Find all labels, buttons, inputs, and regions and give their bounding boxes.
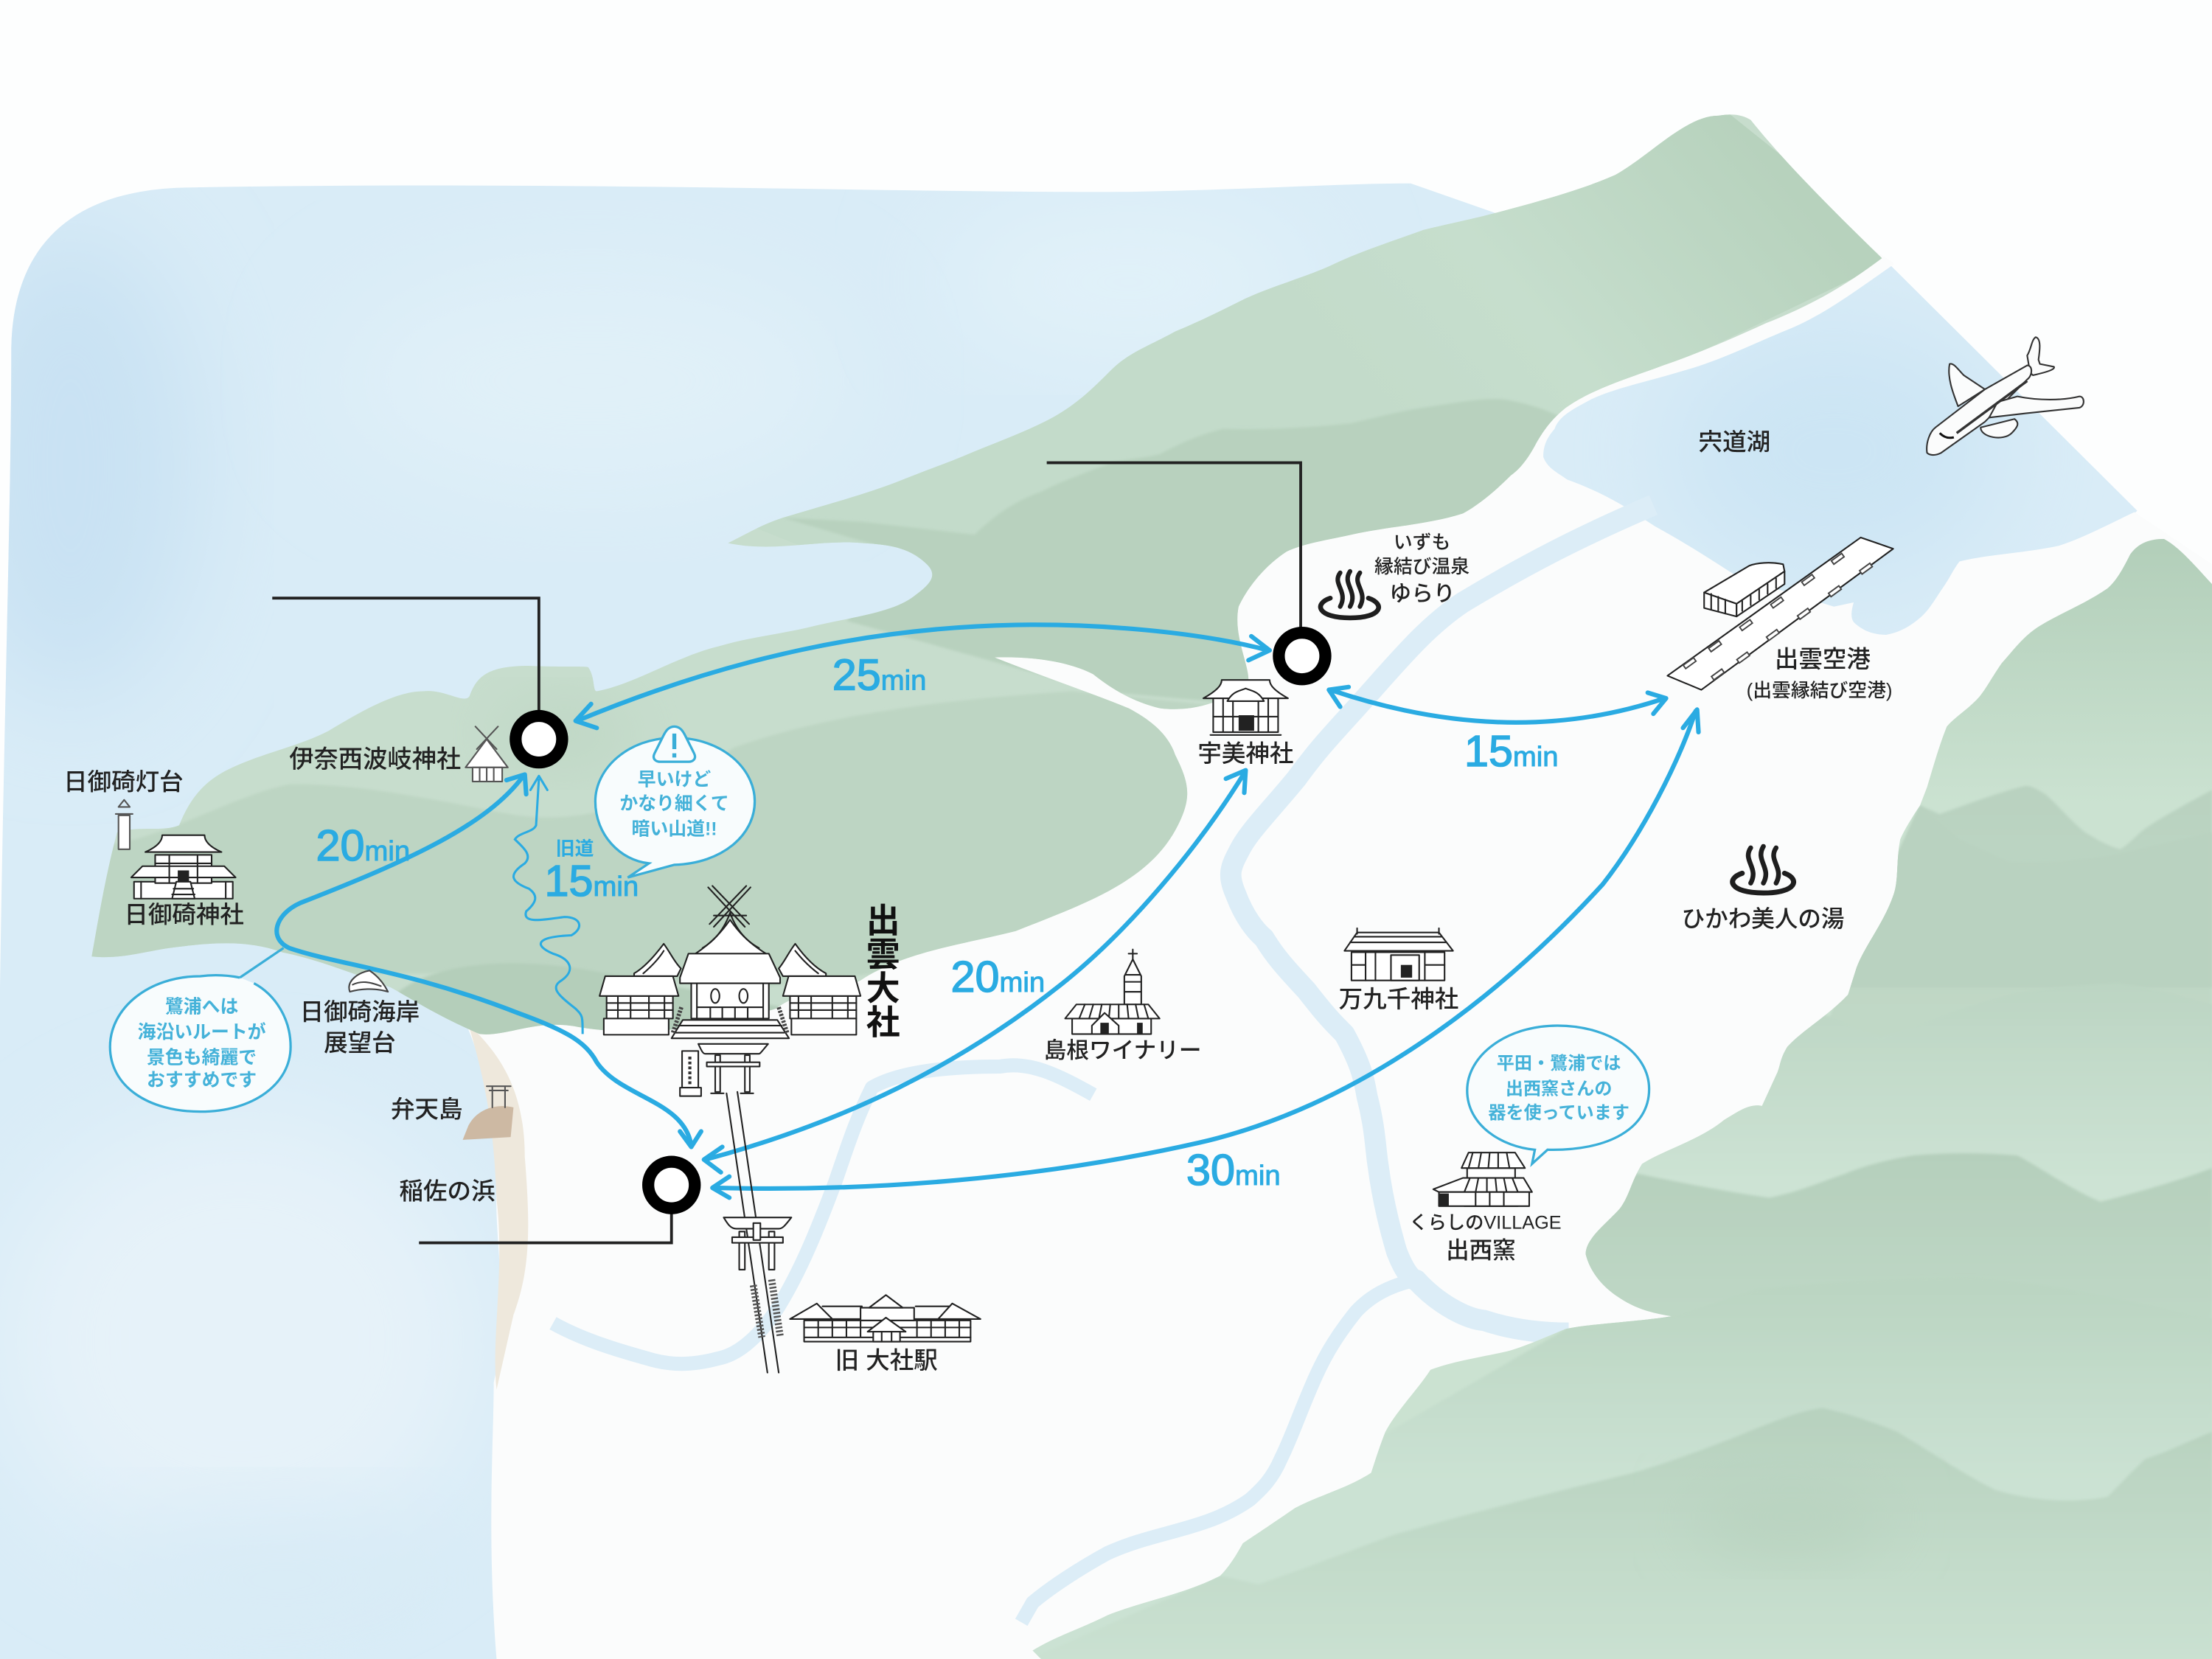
- right wing: [790, 996, 856, 1018]
- label: airport nickname: (出雲縁結び空港): [1747, 680, 1893, 701]
- label: lookout second line: 展望台: [324, 1029, 396, 1056]
- time label: 30min: 30min: [1186, 1145, 1281, 1194]
- callout: Shussai kiln tableware: 平田・鷺浦では: [1497, 1054, 1621, 1074]
- callout: Shussai kiln tableware: 出西窯さんの: [1506, 1079, 1612, 1099]
- icon: Shimane winery: [1065, 950, 1160, 1034]
- callout: coastal route: 鷺浦へは: [165, 997, 238, 1018]
- label: Izumo Enmusubi onsen: ゆらり: [1390, 582, 1455, 606]
- label: Lake Shinji: 宍道湖: [1699, 428, 1770, 455]
- label: Kurashi no village: くらしのVILLAGE: [1409, 1212, 1562, 1233]
- time label: 20min west: 20min: [316, 821, 410, 870]
- label: Hinomisaki shrine: 日御碕神社: [124, 901, 244, 928]
- icon: Yurari hot spring: [1321, 571, 1379, 618]
- callout: old road warning: かなり細くて: [619, 793, 729, 814]
- rivers: [553, 505, 1653, 1622]
- icon: airport hangar: [1704, 563, 1784, 616]
- central hall: [692, 982, 769, 1018]
- lead line: Yurari stop: [1047, 463, 1301, 629]
- label: Inasaki shrine: 伊奈西波岐神社: [289, 746, 461, 773]
- heading: Izumo Taisha: [866, 902, 900, 1041]
- north range shading: [757, 114, 1882, 546]
- icon: pine rows: [754, 1279, 780, 1338]
- time label: 15min old road: 15min: [545, 856, 639, 905]
- left wing: [607, 996, 673, 1018]
- route: old mountain road 15min: [513, 776, 582, 1034]
- label: Umi shrine: 宇美神社: [1197, 740, 1293, 767]
- callout: coastal route: [110, 948, 291, 1112]
- route: 30min Taisha to airport: [712, 709, 1699, 1197]
- mountains: south-east range: [987, 522, 2212, 1659]
- route: 20min west loop: [276, 774, 701, 1147]
- label: Shimane winery: 島根ワイナリー: [1044, 1038, 1201, 1063]
- icon: Shussai kiln house: [1433, 1152, 1532, 1206]
- stop ring: Inasaki: [515, 716, 562, 762]
- land: [465, 251, 2212, 1659]
- route: 20min Taisha to Umi: [704, 771, 1245, 1172]
- label: Hinomisaki lighthouse: 日御碕灯台: [63, 768, 184, 795]
- callout: coastal route: 海沿いルートが: [138, 1021, 266, 1043]
- icon: Hinomisaki shrine: [131, 835, 236, 899]
- icon: coastal rock: [349, 970, 388, 992]
- label: Izumo Enmusubi onsen: [1374, 532, 1470, 606]
- icon: Inasaki shrine: [465, 726, 508, 782]
- heading: Izumo Taisha: 雲: [866, 936, 900, 974]
- label: Bentenjima: 弁天島: [391, 1096, 463, 1122]
- icon: Umi shrine: [1203, 680, 1288, 735]
- label: Izumo airport: 出雲空港: [1775, 646, 1871, 672]
- time label: 25min: 25min: [832, 650, 926, 700]
- icon: Izumo Taisha main shrine: [599, 886, 860, 1038]
- label: Mankusen shrine: 万九千神社: [1339, 986, 1458, 1012]
- stop ring: Taisha: [648, 1162, 695, 1208]
- stop ring: Umi: [1279, 633, 1326, 679]
- heading: Izumo Taisha: 出: [866, 902, 900, 940]
- label: Izumo Enmusubi onsen: 縁結び温泉: [1374, 556, 1470, 577]
- chigi crossed roof ends: [708, 886, 751, 927]
- label: Shussai kiln: 出西窯: [1446, 1237, 1516, 1264]
- route: 15min double arrow: [1329, 687, 1666, 723]
- callout: old road warning: [595, 726, 755, 877]
- icon: airport runway: [1667, 538, 1893, 690]
- callout: coastal route: おすすめです: [147, 1070, 257, 1091]
- icon: Mankusen shrine: [1344, 928, 1453, 981]
- route: 25min double arrow: [576, 625, 1270, 728]
- time label: old road: 旧道: [556, 838, 594, 859]
- icon: old Taisha station: [790, 1295, 981, 1342]
- time label: 15min east: 15min: [1464, 726, 1559, 776]
- sand beach: Inasa: [463, 1024, 528, 1390]
- label: Izumo Enmusubi onsen: いずも: [1394, 532, 1450, 553]
- icon: upper torii: [698, 1044, 768, 1093]
- heading: Izumo Taisha: 大: [866, 970, 900, 1008]
- label: coastal lookout: 日御碕海岸: [300, 998, 420, 1025]
- callout: old road warning: 暗い山道!!: [632, 819, 717, 840]
- icon: lighthouse: [116, 800, 133, 849]
- time label: 20min centre: 20min: [951, 952, 1045, 1001]
- icon: Hikawa hot spring: [1733, 846, 1794, 893]
- callout: Shussai kiln tableware: 器を使っています: [1488, 1103, 1630, 1123]
- icon: Benten torii: [487, 1086, 511, 1107]
- heading: Izumo Taisha: 社: [866, 1003, 900, 1041]
- callout: Shussai kiln tableware: [1467, 1026, 1649, 1164]
- icon: airplane: [1927, 337, 2084, 455]
- road: shrine approach: [726, 1092, 779, 1373]
- icon: sign post: [680, 1051, 701, 1096]
- label: old Taisha station: 旧 大社駅: [835, 1347, 938, 1374]
- lead line: Taisha stop: [419, 1213, 672, 1243]
- steps: [672, 1020, 789, 1038]
- callout: coastal route: 景色も綺麗で: [147, 1048, 257, 1068]
- label: Inasa beach: 稲佐の浜: [399, 1178, 495, 1204]
- lead line: Inasaki stop: [272, 598, 539, 712]
- icon: lower torii: [724, 1217, 791, 1270]
- label: Hikawa onsen: ひかわ美人の湯: [1682, 905, 1844, 932]
- mountains: north range and peninsula: [85, 85, 1905, 1051]
- callout: old road warning: 早いけど: [638, 770, 711, 790]
